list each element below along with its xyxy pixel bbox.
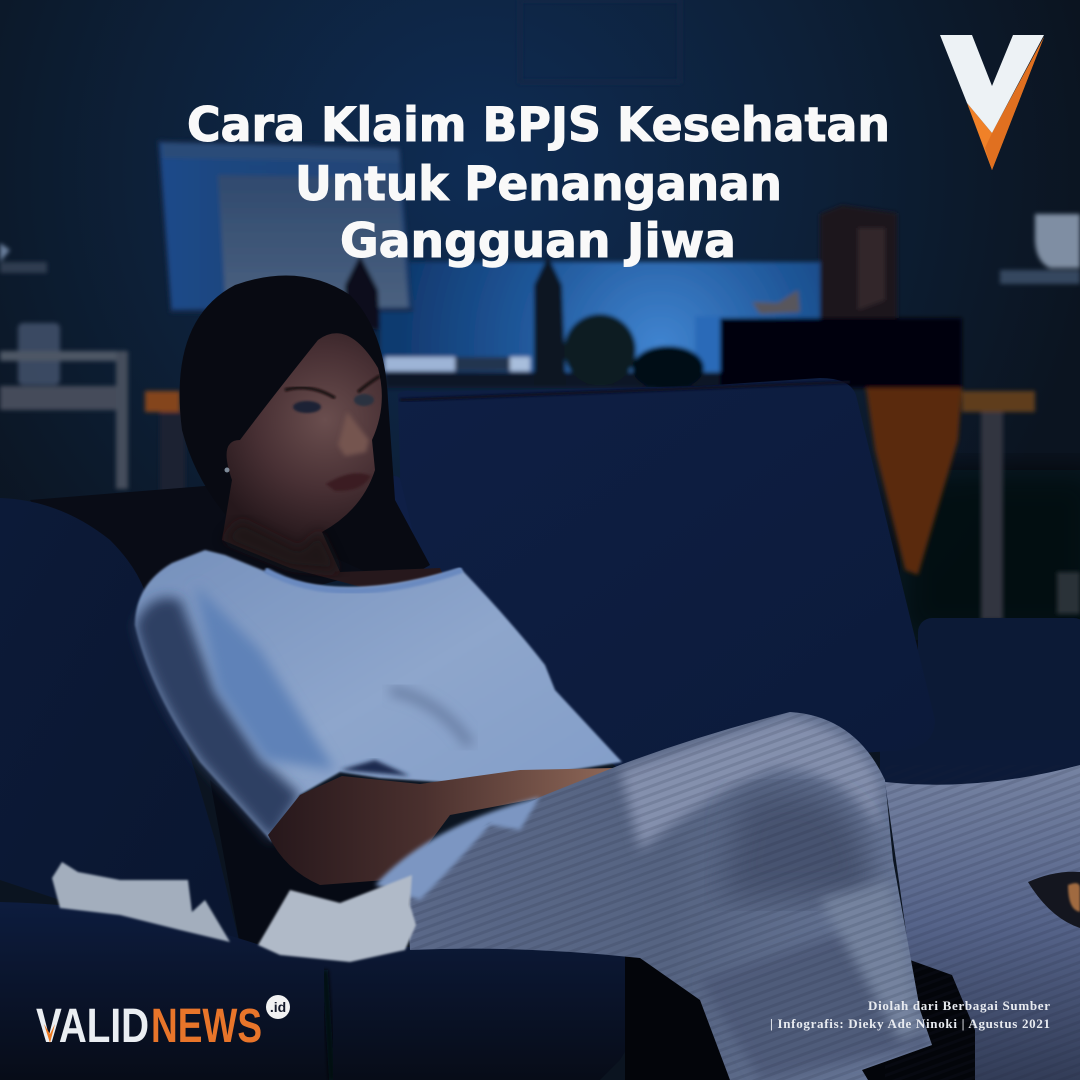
face and neck xyxy=(222,333,448,592)
shirt collar xyxy=(265,570,462,591)
sofa xyxy=(0,378,1080,1080)
left leg xyxy=(400,700,940,1080)
sofa dark back behind woman xyxy=(30,470,420,600)
hand shadow at right edge xyxy=(1028,872,1080,928)
sleeve inner blue xyxy=(195,585,335,770)
shirt xyxy=(135,550,622,842)
sofa back cushion xyxy=(398,378,935,770)
logo: VALIDNEWS.id: .id xyxy=(270,999,286,1015)
dark lower right wall xyxy=(900,470,1080,640)
title: Untuk Penanganan xyxy=(295,157,782,212)
woman xyxy=(135,276,1080,1080)
source credit: Diolah dari Berbagai Sumber xyxy=(868,998,1050,1013)
shadow under woman xyxy=(210,780,420,950)
eyes, nose and mouth xyxy=(222,376,380,572)
title: Cara Klaim BPJS Kesehatan xyxy=(187,98,890,153)
lace edge xyxy=(375,797,540,900)
sofa right arm and seat xyxy=(880,618,1080,800)
logo: V mark xyxy=(940,35,1044,170)
background room: monitor, desk and shelves xyxy=(0,0,1080,620)
logo: VALIDNEWS.id xyxy=(36,995,290,1053)
logo: VALIDNEWS.id: VALID xyxy=(36,1000,149,1053)
sofa seat cushion xyxy=(0,902,640,1080)
title xyxy=(187,98,890,269)
shirt sleeve shadow xyxy=(135,598,300,842)
source credit xyxy=(770,998,1050,1031)
source credit: | Infografis: Dieky Ade Ninoki | Agustus 2021 xyxy=(770,1016,1050,1031)
sofa left cushion xyxy=(0,498,240,945)
arm xyxy=(268,768,615,885)
right leg xyxy=(885,765,1080,1080)
black gap below legs xyxy=(625,955,985,1080)
title: Gangguan Jiwa xyxy=(340,214,736,269)
logo: VALIDNEWS.id: NEWS xyxy=(151,1000,262,1053)
shirt folds xyxy=(390,690,470,745)
tissues xyxy=(52,862,416,962)
hair back xyxy=(180,276,430,585)
